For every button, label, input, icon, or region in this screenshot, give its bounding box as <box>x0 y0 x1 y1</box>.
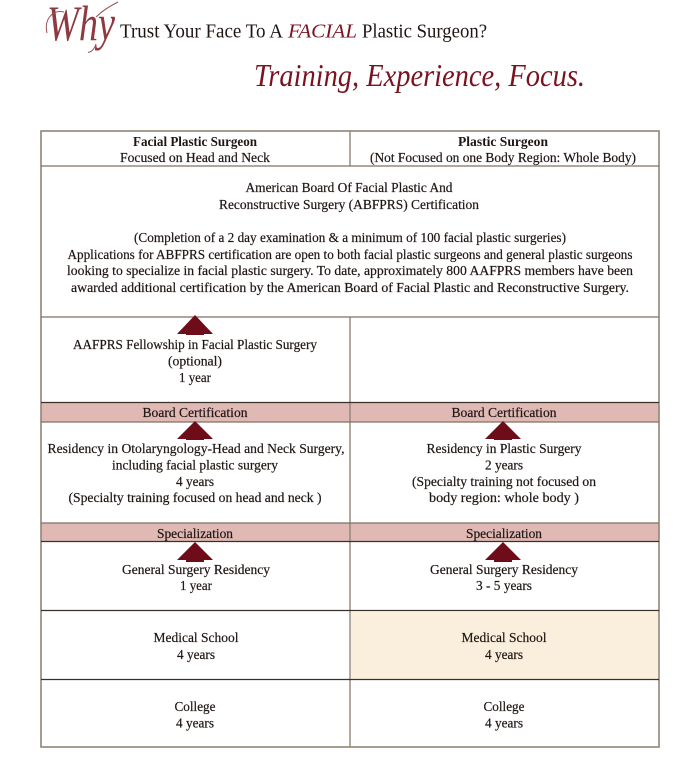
general surgery left: 1 year <box>180 578 212 593</box>
general surgery right: General Surgery Residency <box>430 562 578 577</box>
medical school left: Medical School <box>154 630 239 645</box>
arrow: residency right <box>485 421 521 440</box>
certification text block: American Board Of Facial Plastic And <box>246 180 453 195</box>
header: facial plastic surgeon: Focused on Head and Neck <box>120 150 270 165</box>
certification text block: Applications for ABFPRS certification are open to both facial plastic surgeons and general plastic surgeons <box>68 247 632 262</box>
college left: 4 years <box>176 716 214 730</box>
medical school left <box>154 630 239 662</box>
residency text right: Residency in Plastic Surgery <box>426 441 582 456</box>
fellowship text: 1 year <box>179 370 211 385</box>
certification text block: looking to specialize in facial plastic surgery. To date, approximately 800 AAFPRS members have been <box>67 263 633 278</box>
title <box>46 0 487 52</box>
certification text block <box>67 180 633 295</box>
college right: 4 years <box>485 716 523 730</box>
label: specialization left: Specialization <box>157 526 233 541</box>
residency text left: Residency in Otolaryngology-Head and Neck Surgery, <box>48 441 344 456</box>
fellowship text: (optional) <box>168 354 222 370</box>
residency text left <box>48 441 344 506</box>
arrow: general surgery left <box>177 542 213 562</box>
medical school highlight <box>351 612 658 679</box>
residency text left: including facial plastic surgery <box>112 458 278 472</box>
certification text block: (Completion of a 2 day examination & a minimum of 100 facial plastic surgeries) <box>134 230 566 246</box>
medical school right: Medical School <box>462 630 547 645</box>
table grid <box>41 131 659 747</box>
comparison table <box>41 131 659 747</box>
general surgery left: General Surgery Residency <box>122 562 270 577</box>
college left: College <box>174 699 216 714</box>
title line: FACIAL <box>287 20 357 42</box>
residency text right: 2 years <box>485 458 523 472</box>
college right <box>484 699 524 730</box>
label: board certification right: Board Certification <box>452 405 557 420</box>
header: facial plastic surgeon <box>120 134 270 165</box>
medical school right <box>462 630 547 662</box>
residency text left: 4 years <box>176 474 214 489</box>
certification text block: awarded additional certification by the American Board of Facial Plastic and Reconstructive Surgery. <box>71 280 629 295</box>
band: specialization <box>41 523 659 542</box>
residency text left: (Specialty training focused on head and neck ) <box>68 490 322 506</box>
medical school left: 4 years <box>177 647 215 662</box>
fellowship text: AAFPRS Fellowship in Facial Plastic Surgery <box>73 337 317 352</box>
subtitle: Training, Experience, Focus. <box>254 57 585 93</box>
residency text right: body region: whole body ) <box>429 490 579 506</box>
college right: College <box>484 699 524 714</box>
label: specialization right: Specialization <box>466 526 542 541</box>
band: board certification <box>41 403 659 422</box>
arrow: residency left <box>177 421 213 440</box>
arrow: fellowship <box>177 315 213 335</box>
arrows <box>177 315 521 562</box>
title line: Plastic Surgeon? <box>362 20 487 42</box>
title line: Trust Your Face To A <box>120 20 283 42</box>
residency text right <box>412 441 596 506</box>
general surgery right <box>430 562 578 593</box>
title line <box>120 20 487 42</box>
label: board certification left: Board Certification <box>142 405 248 420</box>
header: facial plastic surgeon: Facial Plastic Surgeon <box>133 134 257 149</box>
residency text right: (Specialty training not focused on <box>412 474 596 490</box>
header: plastic surgeon <box>370 134 636 166</box>
college left <box>174 699 216 730</box>
medical school right: 4 years <box>485 647 523 662</box>
arrow: general surgery right <box>485 542 521 562</box>
fellowship text <box>73 337 317 385</box>
header: plastic surgeon: Plastic Surgeon <box>458 134 548 149</box>
general surgery left <box>122 562 270 593</box>
header: plastic surgeon: (Not Focused on one Body Region: Whole Body) <box>370 150 636 166</box>
certification text block: Reconstructive Surgery (ABFPRS) Certification <box>219 197 479 213</box>
general surgery right: 3 - 5 years <box>476 578 532 593</box>
